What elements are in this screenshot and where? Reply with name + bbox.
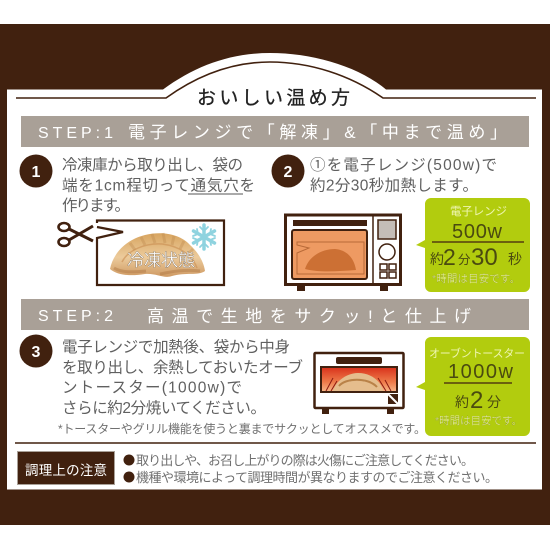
- number badge 1: [20, 154, 52, 188]
- cautions list: 取り出しや、お召し上がりの際は火傷にご注意してください。: [136, 453, 474, 468]
- step 2 instructions: ①を電子レンジ(500w)で: [310, 156, 497, 174]
- cooking caution label: [18, 452, 114, 484]
- icon: scissors: [58, 223, 93, 246]
- callout: toaster time: 1000w: [448, 361, 514, 383]
- callout: toaster time: 分: [487, 394, 501, 410]
- callout: microwave time: 約: [430, 251, 444, 267]
- callout: microwave time: 秒: [508, 251, 522, 267]
- step 2 instructions: 約2分30秒加熱します。: [310, 176, 478, 194]
- step 1 header: [21, 116, 529, 147]
- step 1 instructions: 冷凍庫から取り出し、袋の: [62, 156, 243, 174]
- toaster tip note: *トースターやグリル機能を使うと裏までサクッとしてオススメです。: [58, 421, 426, 436]
- icon: microwave: [286, 215, 400, 291]
- cautions list: [124, 453, 498, 485]
- callout: microwave time: 30: [471, 244, 498, 271]
- cooking caution label: 調理上の注意: [25, 463, 107, 478]
- step 3 instructions: さらに約2分焼いてください。: [62, 399, 266, 417]
- step 1 header: STEP:1: [38, 125, 113, 142]
- number badge 2: 2: [284, 164, 293, 181]
- step 1 instructions: [62, 156, 255, 214]
- title: おいしい温め方: [197, 87, 350, 109]
- callout: toaster time: 約: [455, 394, 469, 410]
- callout: microwave time: 分: [458, 253, 471, 267]
- number badge 3: [20, 334, 52, 368]
- step 2 instructions: [310, 156, 497, 194]
- number badge 1: 1: [32, 164, 41, 181]
- step 1 header: 電子レンジで「解凍」&「中まで温め」: [128, 123, 507, 142]
- callout: microwave time: 電子レンジ: [450, 205, 507, 218]
- divider: [15, 442, 536, 444]
- step 2 header: [21, 299, 529, 330]
- callout: microwave time: *時間は目安です。: [432, 273, 520, 285]
- callout: microwave time: [416, 198, 530, 292]
- step 3 instructions: を取り出し、余熱しておいたオーブ: [62, 358, 303, 376]
- callout: toaster time: 2: [470, 387, 483, 414]
- icon: toaster oven: [314, 353, 404, 414]
- icon: snowflake: [193, 225, 215, 249]
- callout: toaster time: *時間は目安です。: [435, 415, 522, 427]
- callout: microwave time: 2: [443, 244, 456, 270]
- step 3 instructions: ントースター(1000w)で: [62, 378, 242, 396]
- step 1 instructions: 作ります。: [62, 196, 130, 214]
- callout: toaster time: オーブントースター: [429, 346, 525, 360]
- step 2 header: 高温で生地をサクッ!と仕上げ: [147, 307, 471, 326]
- step 1 instructions: 端を1cm程切って通気穴を: [62, 176, 255, 194]
- heading arch line: [16, 62, 536, 98]
- number badge 2: [272, 154, 304, 188]
- frozen bag with dumpling: [97, 220, 224, 285]
- step 3 instructions: [62, 338, 303, 417]
- frozen label: 冷凍状態: [127, 251, 195, 270]
- step 3 instructions: 電子レンジで加熱後、袋から中身: [62, 338, 290, 356]
- callout: toaster time: [416, 337, 530, 436]
- callout: microwave time: 500w: [452, 221, 503, 243]
- white arched panel: [7, 53, 542, 490]
- dumpling image: [110, 233, 205, 277]
- step 2 header: STEP:2: [38, 308, 113, 325]
- cautions list: 機種や環境によって調理時間が異なりますのでご注意ください。: [136, 470, 498, 485]
- number badge 3: 3: [32, 344, 41, 361]
